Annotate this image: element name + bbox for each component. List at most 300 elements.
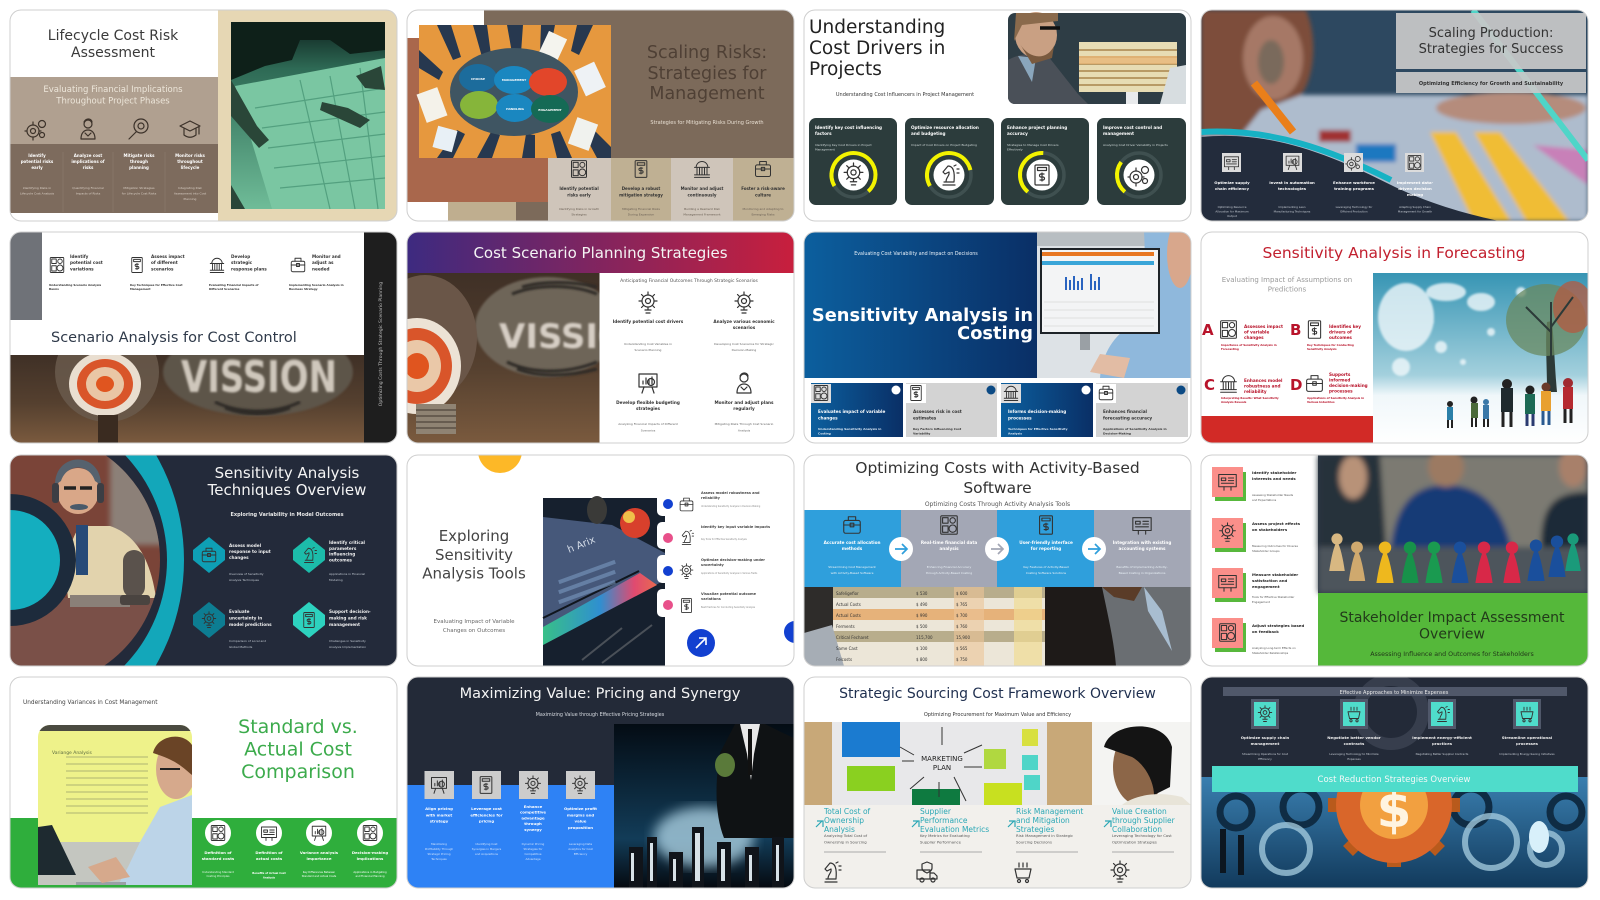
steps band: Identifying Risks in — [23, 186, 51, 190]
pricing item 3: Strategies for — [523, 847, 543, 851]
pricing item 1: Techniques — [430, 857, 447, 861]
technique 4 — [293, 602, 371, 649]
dark curved base — [1201, 136, 1499, 221]
definition item 2: Analysis — [263, 876, 276, 880]
subtitle: Understanding Cost Influencers in Project Management — [836, 92, 974, 98]
photo: printed cost table and analyst: Safeligefior — [836, 591, 859, 596]
strategy tiles: Mitigating Financial Risks — [622, 207, 660, 211]
strategies: Implement data- — [1397, 180, 1433, 185]
feature columns: methods — [842, 546, 863, 551]
option B — [1290, 321, 1361, 351]
title: Maximizing Value: Pricing and Synergy — [460, 686, 741, 702]
feature columns — [804, 510, 1191, 587]
photo: winter scene with people and tree — [1373, 273, 1593, 443]
technique 4: management — [329, 622, 360, 627]
scenario items: Implementing Scenario Analysis in — [289, 283, 344, 287]
photo: analyst with variance analysis screen — [38, 725, 196, 885]
strategy 1: Streamlining Operations for Cost — [1242, 752, 1288, 756]
panel: Sensitivity Analysis Techniques Overview slide — [0, 349, 397, 771]
photo: hand with pencil over bar chart — [1201, 10, 1588, 221]
strategy 1: Efficiency — [1258, 757, 1272, 761]
feature columns: Benefits of Implementing Activity- — [1116, 565, 1168, 569]
photo: round table meeting with diagram: CHOOSE — [471, 77, 485, 81]
definition item 4: and Financial Planning — [355, 874, 385, 878]
title: Standard vs. — [238, 716, 358, 738]
technique 3 — [193, 602, 272, 649]
title: Techniques Overview — [207, 481, 366, 499]
tile 3: Analysis — [1008, 432, 1022, 436]
title: Software — [963, 479, 1032, 497]
photo: printed cost table and analyst: $ 100 — [916, 646, 928, 651]
photo: printed cost table and analyst: $ 750 — [956, 657, 968, 662]
option D — [1290, 372, 1368, 404]
tool card 1: Understanding Sensitivity Analysis in Decision-Making — [701, 505, 761, 508]
stakeholder item 2: on stakeholders — [1252, 527, 1288, 532]
steps band: planning — [129, 165, 149, 170]
steps band: implications of — [71, 159, 105, 164]
steps band: risks — [83, 165, 94, 170]
strategy tiles: Emerging Risks — [751, 212, 775, 216]
strategy 3: practices — [1432, 741, 1453, 746]
scenario items: needed — [312, 266, 330, 271]
option B: Key Techniques for Conducting — [1307, 343, 1354, 347]
definition item 1: Understanding Standard — [202, 871, 234, 874]
stakeholder item 4 — [1212, 618, 1304, 655]
photo: analyst with cost table — [1008, 12, 1186, 104]
pricing item 2: Identifying Cost — [476, 842, 498, 846]
tile 4 — [1096, 383, 1188, 437]
definition item 2: Definition of — [255, 850, 283, 855]
feature columns: through Activity-Based Costing — [926, 571, 972, 575]
planning items: Analyzing Financial Impacts of Different — [618, 422, 678, 426]
scenario items: Key Techniques for Effective Cost — [130, 283, 183, 287]
feature columns: Based Costing in Organizations — [1119, 571, 1166, 575]
technique 2: Modeling — [329, 578, 343, 582]
dark side strip with vertical caption — [364, 232, 397, 443]
driver card 4 — [1097, 118, 1186, 206]
scenario items: adjust as — [312, 260, 334, 265]
title: Strategic Sourcing Cost Framework Overview — [839, 686, 1156, 702]
strategy tiles: Building a Resilient Risk — [684, 207, 720, 211]
scenario items: Understanding Scenario Analysis — [49, 283, 101, 287]
gradient title banner: Cost Scenario Planning Strategies — [473, 244, 728, 262]
photo: gears with glowing dollar — [1201, 747, 1588, 888]
green band — [10, 818, 397, 888]
technique 1: Analysis Techniques — [229, 578, 259, 582]
title: Cost Drivers in — [809, 38, 945, 59]
scenario items: Different Scenarios — [209, 287, 240, 291]
subtitle band: Evaluating Financial Implications — [43, 85, 183, 95]
option C — [1204, 376, 1283, 404]
definition item 3: Variance analysis — [300, 850, 338, 855]
tool card 4: Visualize potential outcome — [701, 592, 756, 596]
photo: analyst with variance analysis screen: Variange Analysis — [52, 750, 92, 756]
definition item 4: implications — [357, 856, 384, 861]
planning items: Understanding Cost Variables in — [624, 342, 672, 346]
definition item 3 — [300, 820, 339, 878]
option B: B — [1290, 321, 1301, 339]
tile 2: Assesses risk in cost — [913, 409, 962, 414]
feature columns: with Activity-Based Software — [831, 571, 874, 575]
planning items: strategies — [636, 406, 660, 411]
strategy 3 — [1412, 699, 1472, 756]
scenario items — [49, 254, 344, 291]
sourcing item 1: Analysis — [824, 825, 855, 834]
sourcing item 1: Ownership — [824, 816, 864, 825]
strategy 1: Optimize supply chain — [1241, 735, 1289, 740]
feature columns: Enhancing Financial Accuracy — [927, 565, 971, 569]
strategy tiles: risks early — [567, 192, 591, 198]
panel: Understanding Cost Drivers slide — [804, 10, 1191, 221]
panel: Cost Scenario Planning Strategies slide — [373, 232, 794, 443]
technique 4: Support decision- — [329, 609, 371, 614]
teal diagonal stripe — [1473, 10, 1588, 160]
scenario items: Business Strategy — [289, 287, 318, 291]
steps band — [10, 144, 218, 213]
strategies: Enhance workforce — [1333, 180, 1375, 185]
photo: printed cost table and analyst: $ 530 — [916, 591, 928, 596]
option D: decision-making — [1329, 383, 1368, 388]
technique 3: uncertainty in — [229, 616, 262, 620]
planning items: scenarios — [733, 325, 756, 330]
feature columns: Key Features of Activity-Based — [1023, 565, 1069, 569]
photo: tablet with colourful chart: h Arix — [566, 535, 597, 556]
teal ring — [0, 349, 184, 771]
technique 2: Applications in Financial — [329, 572, 365, 576]
driver card 4: Analyzing Cost Driver Variability in Projects — [1103, 143, 1168, 147]
pricing item 1: strategy — [430, 819, 449, 824]
steps band: Planning — [184, 197, 197, 201]
technique 2 — [293, 537, 366, 582]
photo: printed cost table and analyst: $ 990 — [916, 613, 928, 618]
planning items: Analyze various economic — [713, 319, 775, 324]
photo: printed cost table and analyst: Ferments — [836, 624, 855, 629]
pricing item 4 — [564, 771, 597, 856]
panel: Scenario Analysis for Cost Control slide — [10, 232, 397, 443]
tan side panel — [218, 10, 397, 221]
option C: reliability — [1244, 389, 1267, 394]
strategy tiles — [548, 158, 794, 221]
tool card 2 — [657, 522, 788, 549]
sourcing item 2 — [912, 807, 989, 882]
feature columns: Costing Software Solutions — [1026, 571, 1067, 575]
tool card 1: reliability — [701, 496, 721, 500]
pricing item 4: Efficiency — [574, 852, 588, 856]
panel: Scaling Risks slide — [407, 10, 794, 221]
strategies: Allocation for Maximum — [1215, 210, 1249, 214]
photo: marketing plan whiteboard and man: MARKETING — [921, 755, 963, 763]
strategies: Output — [1227, 214, 1238, 218]
strategies: chain efficiency — [1215, 186, 1249, 191]
tile 3: Techniques for Effective Sensitivity — [1008, 427, 1068, 431]
option B: Identifies key — [1329, 324, 1361, 329]
caption strip: Effective Approaches to Minimize Expenses — [1340, 690, 1449, 696]
subtitle: Evaluating Impact of Assumptions on — [1222, 276, 1352, 284]
option C: C — [1204, 376, 1215, 394]
subtitle band — [10, 77, 218, 144]
definition item 3: importance — [307, 856, 332, 861]
strategy 2: Expenses — [1347, 757, 1361, 761]
tile 1 — [811, 383, 903, 437]
sourcing item 4 — [1104, 807, 1176, 882]
technique 4: Analysis Implementation — [329, 645, 366, 649]
sourcing item 2: Evaluation Metrics — [920, 825, 989, 834]
definition item 1: standard costs — [202, 856, 235, 861]
title: Projects — [809, 59, 882, 80]
photo: printed cost table and analyst: Critical Fecharet — [836, 635, 869, 640]
brown header block — [484, 10, 794, 158]
driver card 2 — [905, 118, 994, 205]
photo: printed cost table and analyst: Felcosts — [836, 657, 852, 662]
title: Optimizing Costs with Activity-Based — [855, 459, 1140, 477]
strategy 2: contracts — [1344, 741, 1365, 746]
panel: Standard vs. Actual Cost Comparison slide — [10, 677, 397, 888]
sourcing item 4: Value Creation — [1112, 807, 1167, 816]
tool card 3: uncertainty — [701, 563, 725, 567]
planning items: Scenario Planning — [635, 348, 662, 352]
option D: informed — [1329, 378, 1350, 382]
stakeholder item 2: Assess project effects — [1252, 521, 1300, 526]
strategies: Efficient Production — [1340, 210, 1368, 214]
washed lower area — [804, 805, 1191, 888]
feature columns: Streamlining Cost Management — [828, 565, 876, 569]
tile 3: Informs decision-making — [1008, 409, 1066, 414]
stakeholder item 1: interests and needs — [1252, 476, 1296, 481]
panel: Sensitivity Analysis in Costing slide — [804, 220, 1193, 443]
driver card 2: Optimize resource allocation — [911, 125, 979, 130]
planning items: Developing Cost Scenarios for Strategic — [714, 342, 774, 346]
tool card 2: Identify key input variable impacts — [701, 525, 770, 529]
stakeholder item 2: Measuring Outcomes for Diverse — [1252, 544, 1298, 548]
strategies: Optimize supply — [1214, 180, 1250, 185]
pricing item 1 — [424, 771, 454, 861]
strategy 4: Implementing Energy-Saving Initiatives — [1499, 752, 1555, 756]
definition item 1: Definition of — [204, 850, 232, 855]
photo: printed cost table and analyst: $ 500 — [916, 624, 928, 629]
tool card 3: Applications of Sensitivity Analysis in Various Fields — [701, 572, 758, 575]
tool card 3: Optimize decision-making under — [701, 558, 765, 562]
tool card 1: Assess model robustness and — [701, 491, 759, 495]
planning items — [613, 292, 775, 432]
strategy tiles: Management Framework — [683, 212, 721, 216]
title box: Scaling Production: — [1429, 26, 1553, 41]
planning items: Monitor and adjust plans — [714, 400, 774, 405]
technique 3: Evaluate — [229, 609, 250, 614]
definition item 1 — [202, 820, 235, 878]
scenario items: variations — [70, 266, 94, 271]
sourcing item 2: Key Metrics for Evaluating — [920, 833, 970, 838]
feature columns: User-friendly interface — [1019, 540, 1073, 545]
pricing item 3: Enhance — [524, 804, 542, 809]
photo: light bulb and VISSION sign — [408, 273, 600, 442]
sourcing item 3 — [1008, 807, 1083, 882]
option C: robustness and — [1244, 384, 1280, 388]
stakeholder item 3: satisfaction and — [1252, 578, 1287, 583]
feature columns: Real-time financial data — [921, 540, 977, 545]
title: Scaling Risks: — [647, 43, 767, 63]
left teal circle — [0, 510, 60, 610]
strategy tiles: Foster a risk-aware — [741, 186, 785, 191]
photo: printed cost table and analyst: Actual Costs — [836, 613, 861, 618]
planning items: regularly — [733, 406, 755, 411]
pricing item 1: Maximizing — [431, 842, 447, 846]
partial blue circle — [784, 621, 806, 643]
driver card 3: Effectively — [1007, 148, 1023, 152]
steps band: through — [130, 159, 148, 164]
photo: printed cost table and analyst: $ 800 — [916, 657, 928, 662]
pricing item 3: competitive — [520, 810, 546, 815]
option D: D — [1290, 376, 1302, 394]
sourcing item 4: Optimization Strategies — [1112, 839, 1157, 844]
tile 3 — [1001, 383, 1093, 437]
option C: Analysis Reveals — [1221, 400, 1247, 404]
feature columns: analysis — [939, 546, 959, 551]
scenario items: strategic — [231, 260, 253, 265]
scenario items: Develop — [231, 254, 250, 259]
tool card 4 — [657, 589, 788, 617]
photo: round table meeting with diagram: ENGAGEMENT — [538, 108, 563, 112]
definition item 3: Standard and Actual Costs — [302, 874, 337, 878]
stakeholder item 4: on feedback — [1252, 629, 1279, 634]
feature columns: Integration with existing — [1113, 540, 1171, 545]
title: Sensitivity Analysis in Forecasting — [1262, 244, 1526, 262]
title box — [1396, 13, 1586, 69]
driver card 1: Management — [815, 148, 836, 152]
subtitle: Optimizing Procurement for Maximum Value and Efficiency — [924, 712, 1071, 718]
tool card 4: Best Practices for Conducting Sensitivity Analysis — [701, 606, 756, 609]
sourcing item 4: Leveraging Technology for Cost — [1112, 833, 1172, 838]
stakeholder item 4: Adjust strategies based — [1252, 623, 1304, 628]
panel: Cost Reduction Strategies Overview slide — [1201, 677, 1588, 888]
stakeholder item 1: and Expectations — [1252, 498, 1277, 502]
strategies — [1214, 153, 1434, 218]
pricing item 1: with market — [426, 812, 452, 817]
photo: printed cost table and analyst: 115,700 — [916, 635, 933, 640]
tile 1: Understanding Sensitivity Analysis in — [818, 427, 881, 431]
definition item 3: Key Differences Between — [303, 871, 335, 874]
definition item 4: Decision-making — [352, 850, 388, 855]
driver card 4: management — [1103, 131, 1134, 136]
strategies: Adapting Supply Chain — [1399, 205, 1431, 209]
left dark circle — [0, 494, 76, 626]
scenario items: Assess impact — [151, 254, 185, 259]
technique 4: making and risk — [329, 616, 367, 620]
panel: Scaling Production slide — [1201, 10, 1588, 221]
teal curve — [1201, 132, 1391, 180]
green title band: Overview — [1419, 626, 1485, 642]
title: Analysis Tools — [422, 564, 526, 582]
icons row — [25, 119, 200, 140]
strategy tiles: mitigation strategy — [619, 192, 663, 198]
steps band: throughout — [177, 159, 203, 164]
stakeholder item 4: Analyzing Long-term Effects on — [1252, 646, 1296, 650]
photo: tablet with colourful chart — [543, 496, 665, 666]
panel: Sensitivity Analysis in Forecasting slide — [1201, 232, 1593, 443]
definition item 4 — [352, 820, 388, 878]
option C: Interpreting Results: What Sensitivity — [1221, 396, 1279, 400]
dark side strip with vertical caption: Optimizing Costs Through Strategic Scenario Planning — [378, 282, 384, 406]
strategies: Optimizing Resource — [1218, 205, 1246, 209]
green title band: Stakeholder Impact Assessment — [1339, 610, 1565, 626]
teal title banner: Cost Reduction Strategies Overview — [1318, 775, 1471, 785]
subtitle: Evaluating Impact of Variable — [434, 619, 514, 625]
option A: Assesses impact — [1244, 324, 1283, 329]
strategy 2 — [1327, 699, 1381, 761]
photo: monitor with cost report — [1037, 220, 1193, 378]
technique 1: response to input — [229, 549, 271, 554]
caption strip — [1223, 687, 1567, 696]
steps band: Assessment into Cost — [174, 192, 207, 196]
pricing item 3 — [519, 771, 548, 861]
photo: round table meeting with diagram — [417, 25, 611, 158]
steps band: Lifecycle Cost Analysis — [20, 192, 54, 196]
strategies: Management for Growth — [1398, 210, 1432, 214]
steps band: potential risks — [21, 159, 54, 164]
scenario items: scenarios — [151, 266, 174, 271]
pricing item 2: and Acquisitions — [475, 852, 499, 856]
option A: of variable — [1244, 330, 1269, 334]
technique 2: Identify critical — [329, 540, 365, 545]
pricing item 2: efficiencies for — [470, 812, 503, 817]
sourcing item 4: through Supplier — [1112, 816, 1176, 825]
photo: printed cost table and analyst: Same Cast — [836, 646, 858, 651]
panel: Lifecycle Cost Risk Assessment slide — [10, 10, 397, 221]
planning items: Decision-Making — [732, 348, 756, 352]
definition item 2 — [252, 820, 286, 880]
steps band: Mitigation Strategies — [123, 186, 155, 190]
photo: cartoon analyst at microphone — [10, 455, 170, 666]
option D: processes — [1329, 388, 1353, 394]
subtitle: Optimizing Costs Through Activity Analysis Tools — [925, 501, 1070, 508]
technique 4: Challenges in Sensitivity — [329, 639, 366, 643]
option D: Applications of Sensitivity Analysis in — [1307, 396, 1364, 400]
pricing item 3: Dynamic Pricing — [522, 842, 544, 846]
technique 2: parameters — [329, 546, 357, 551]
planning items: Scenarios — [641, 428, 656, 432]
strategy 1 — [1241, 699, 1290, 761]
option A: Forecasting — [1221, 347, 1239, 351]
photo: marketing plan whiteboard and man — [804, 722, 1191, 805]
technique 1: Assess model — [229, 543, 261, 548]
sourcing item 1: Ownership in Sourcing — [824, 839, 867, 844]
photo: printed cost table and analyst: $ 600 — [956, 591, 968, 596]
blue hero block — [804, 232, 1037, 378]
strategy tiles: Identifying Risks in Growth — [559, 207, 599, 211]
driver card 1: factors — [815, 131, 832, 136]
driver card 3 — [1001, 118, 1089, 206]
technique 3: Global Methods — [229, 645, 253, 649]
option B: outcomes — [1329, 335, 1352, 340]
pricing item 1: Profitability Through — [425, 847, 453, 851]
pricing item 4: value — [575, 819, 587, 824]
sourcing item 3: Strategies — [1016, 825, 1054, 834]
steps band: lifecycle — [181, 165, 200, 170]
pricing item 4: Analytics for Cost — [568, 847, 594, 851]
title: Sensitivity Analysis — [215, 464, 359, 482]
tile 3: processes — [1008, 416, 1032, 420]
photo: printed cost table and analyst: $ 565 — [956, 646, 968, 651]
planning items: Mitigating Risks Through Cost Scenario — [715, 422, 773, 426]
stakeholder item 3: engagement — [1252, 584, 1280, 589]
scenario items: Basics — [49, 287, 59, 291]
tool card 3 — [657, 555, 788, 583]
yellow circle — [478, 429, 522, 473]
tile 2 — [906, 383, 997, 437]
title: Assessment — [71, 45, 155, 61]
subtitle: Predictions — [1268, 286, 1307, 294]
subtitle: Exploring Variability in Model Outcomes — [230, 512, 344, 518]
planning items: Analysis — [738, 428, 751, 432]
